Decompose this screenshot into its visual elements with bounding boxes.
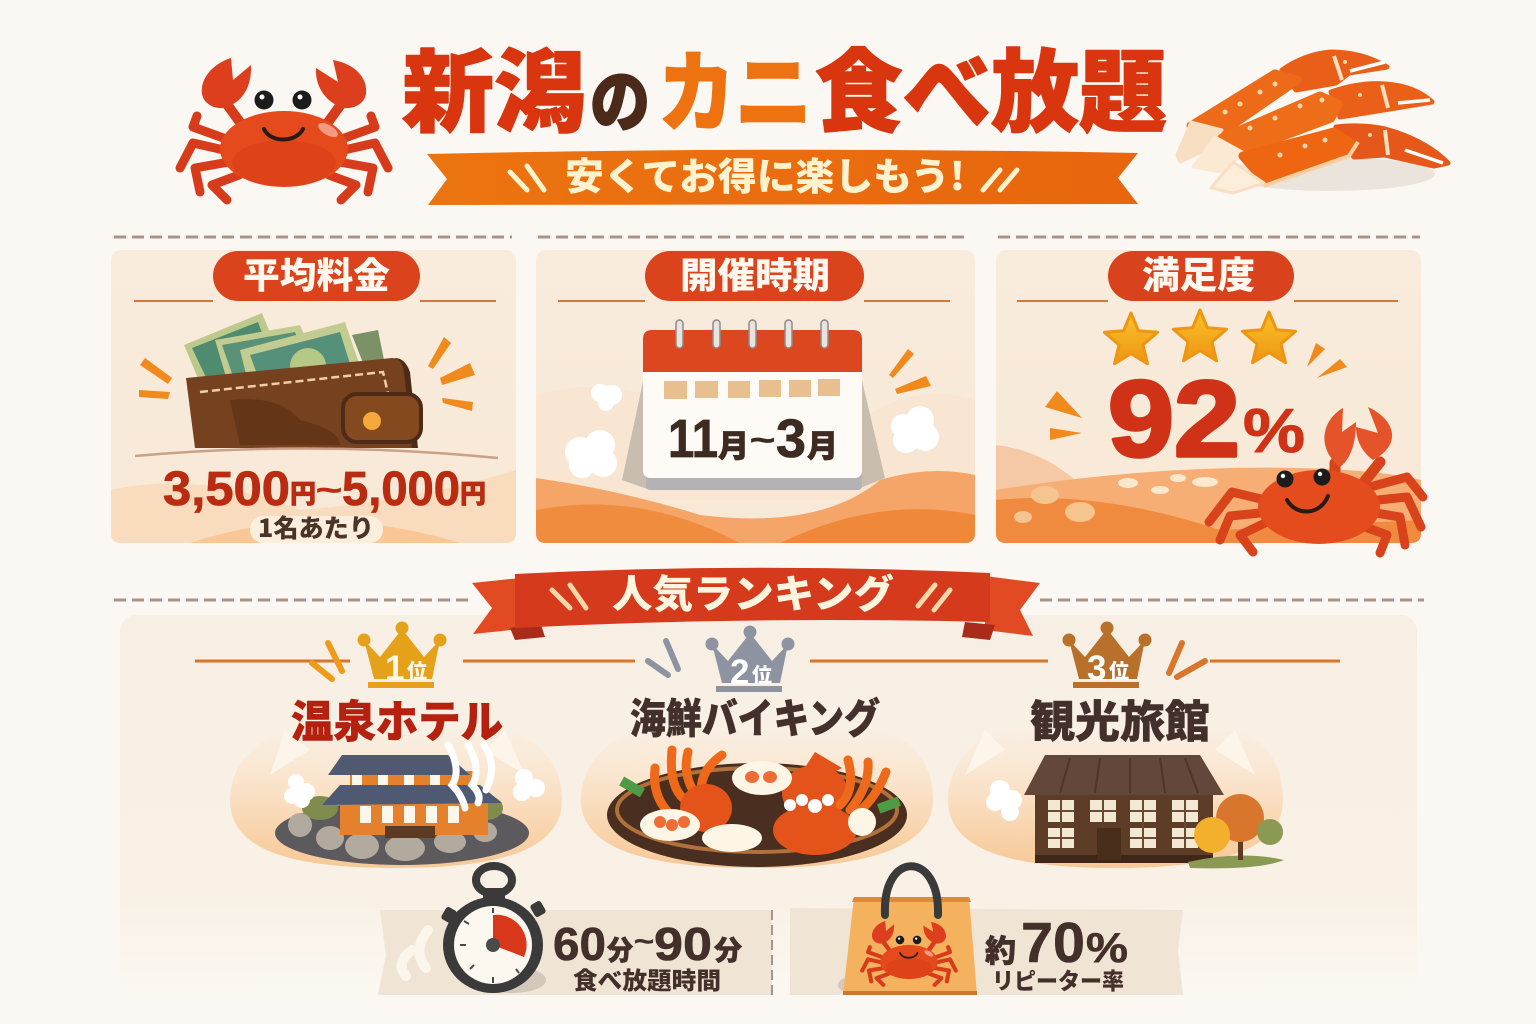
satisfaction value: 92 bbox=[1108, 358, 1240, 479]
satisfaction value bbox=[1108, 358, 1305, 479]
ranking ribbon heading bbox=[472, 564, 1040, 640]
rank 2 crown: 位 bbox=[752, 659, 772, 688]
caption: repeat rate: リピーター率 bbox=[992, 962, 1124, 996]
title: 新潟 bbox=[402, 20, 586, 150]
value: dining time: 分 bbox=[607, 929, 633, 968]
title bbox=[402, 20, 1167, 150]
date range: 月 bbox=[718, 421, 749, 466]
stat strip: dining time bbox=[378, 866, 772, 996]
price range: 5,000 bbox=[342, 463, 460, 516]
rank 3 crown bbox=[1062, 622, 1205, 688]
texture blobs bbox=[1014, 474, 1218, 523]
icon: three stars bbox=[1104, 310, 1296, 364]
date range: 3 bbox=[776, 409, 806, 469]
satisfaction value: % bbox=[1243, 397, 1305, 466]
icon: cartoon crab bbox=[180, 58, 388, 200]
value: repeat rate: 70 bbox=[1021, 911, 1085, 975]
heading pill: satisfaction: 満足度 bbox=[1142, 245, 1255, 299]
icon: clouds bbox=[565, 384, 939, 478]
date range: ~ bbox=[750, 424, 775, 457]
value: dining time: 90 bbox=[654, 918, 712, 970]
rank 1 crown: 1 bbox=[385, 649, 404, 688]
panel: season bbox=[536, 247, 975, 543]
price range: ~ bbox=[316, 474, 342, 507]
heading pill: average price bbox=[213, 247, 420, 301]
panel: ranking background bbox=[120, 615, 1417, 1000]
heading pill: average price: 平均料金 bbox=[243, 247, 390, 299]
heading pill: season: 開催時期 bbox=[680, 247, 830, 299]
value: dining time: 分 bbox=[714, 929, 742, 968]
rank 1 crown bbox=[312, 622, 446, 688]
subtitle ribbon: 安くてお得に楽しもう! bbox=[565, 146, 965, 201]
value: repeat rate bbox=[985, 911, 1128, 975]
accent rays bbox=[1045, 343, 1347, 440]
icon: happy crab bbox=[1209, 407, 1423, 553]
value: dining time: 60 bbox=[553, 918, 606, 970]
icon: crab tote bag bbox=[838, 866, 977, 995]
title: カニ bbox=[658, 23, 812, 150]
subtitle ribbon bbox=[427, 146, 1138, 205]
price range: 3,500 bbox=[163, 463, 290, 516]
rank 2 crown: 2 bbox=[730, 653, 749, 692]
rank 3 crown: 位 bbox=[1109, 655, 1129, 684]
icon: calendar bbox=[622, 320, 931, 490]
ranking ribbon heading: 人気ランキング bbox=[612, 564, 894, 620]
date range: 11 bbox=[668, 409, 718, 469]
panel: average price bbox=[111, 247, 516, 545]
rank 1 crown: 位 bbox=[407, 655, 427, 684]
illustration: traditional inn bbox=[948, 725, 1284, 868]
price range bbox=[163, 463, 486, 516]
icon: wallet with banknotes bbox=[139, 313, 475, 448]
heading pill: season bbox=[645, 247, 864, 301]
stat strip: repeat rate bbox=[790, 866, 1183, 996]
panel: satisfaction bbox=[996, 245, 1423, 553]
icon: stopwatch bbox=[440, 866, 547, 993]
value: dining time bbox=[553, 918, 742, 970]
caption: dining time: 食べ放題時間 bbox=[573, 961, 721, 996]
divider lines bbox=[114, 237, 1424, 883]
title: 食べ放題 bbox=[815, 20, 1167, 150]
date range: 月 bbox=[807, 421, 838, 466]
rank 2 name: 海鮮バイキング bbox=[630, 685, 880, 745]
price range: 円 bbox=[460, 474, 486, 511]
value: repeat rate: 約 bbox=[985, 926, 1016, 971]
icon: crab legs bbox=[1177, 52, 1448, 193]
illustration: hot spring hotel bbox=[230, 725, 562, 868]
value: repeat rate: % bbox=[1086, 924, 1128, 971]
rank 1 name: 温泉ホテル bbox=[291, 686, 503, 750]
title: の bbox=[590, 47, 650, 146]
heading pill: satisfaction bbox=[1108, 245, 1294, 301]
per-person note: 1名あたり bbox=[258, 509, 374, 545]
price range: 円 bbox=[290, 474, 316, 511]
illustration: seafood platter bbox=[581, 725, 933, 868]
date range bbox=[668, 409, 838, 469]
rank 2 crown bbox=[648, 626, 794, 692]
rank 3 name: 観光旅館 bbox=[1030, 686, 1210, 750]
value: dining time: ~ bbox=[634, 926, 654, 956]
rank 3 crown: 3 bbox=[1087, 649, 1106, 688]
